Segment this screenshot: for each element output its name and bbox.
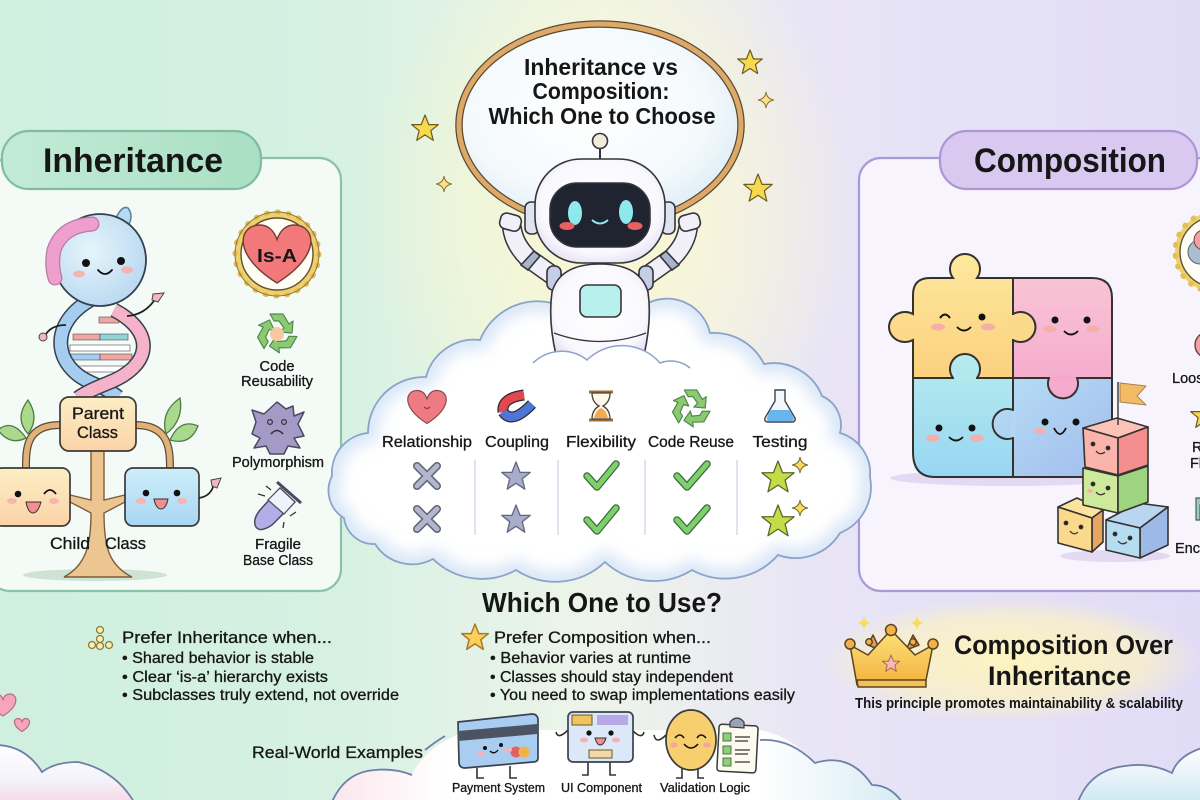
cloud front bumps xyxy=(490,346,715,420)
icon: fragile base class xyxy=(243,482,313,569)
label: child class xyxy=(50,535,146,553)
heading: composition: Composition xyxy=(974,142,1166,180)
column: coupling: Coupling xyxy=(485,434,549,451)
column: testing xyxy=(752,390,808,536)
puzzle: yellow piece xyxy=(889,254,1013,378)
badge: is-a xyxy=(235,212,319,296)
text block: prefer inheritance: Prefer Inheritance when... xyxy=(122,628,332,647)
example: payment system xyxy=(452,714,545,795)
robot head xyxy=(525,134,675,263)
robot xyxy=(498,134,702,366)
box: child left xyxy=(0,468,70,526)
box: parent class xyxy=(60,397,136,451)
label: real-world examples: Real-World Examples xyxy=(252,743,423,762)
text block: prefer composition: Prefer Composition when... xyxy=(494,628,711,647)
block: yellow xyxy=(1058,498,1103,552)
panel: composition xyxy=(859,131,1200,591)
example: ui component: UI Component xyxy=(561,781,643,795)
column: code reuse xyxy=(648,390,734,531)
icon: stars around the title xyxy=(412,50,774,201)
callout: composition over inheritance: Composition Over xyxy=(954,630,1173,660)
flag xyxy=(1118,382,1146,425)
icon: code reusability: Reusability xyxy=(241,374,314,390)
column: relationship: Relationship xyxy=(382,434,472,451)
icon: gold star xyxy=(462,624,488,649)
callout: composition over inheritance xyxy=(822,598,1200,722)
heading: which one to use: Which One to Use? xyxy=(482,587,722,618)
title text: Which One to Choose xyxy=(488,103,716,129)
label: child class: Child xyxy=(50,535,90,553)
text block: prefer inheritance: • Subclasses truly extend, not override xyxy=(122,687,399,704)
feature: runtime flexibility (clipped) xyxy=(1190,402,1200,472)
column: coupling xyxy=(485,395,549,532)
icon: polymorphism: Polymorphism xyxy=(232,455,324,471)
text block: prefer inheritance xyxy=(88,626,399,704)
icon: fragile base class: Base Class xyxy=(243,553,313,569)
example: payment system: Payment System xyxy=(452,781,545,795)
icon: fragile base class: Fragile xyxy=(255,537,301,553)
box: child right xyxy=(125,468,221,526)
icon: code reusability: Code xyxy=(260,359,294,375)
icon: crown xyxy=(845,616,938,687)
column: flexibility xyxy=(566,392,636,531)
title oval xyxy=(459,24,741,226)
bottom clouds xyxy=(0,730,1200,800)
title text: Composition: xyxy=(532,78,670,104)
example: validation logic: Validation Logic xyxy=(660,781,750,795)
panel: inheritance xyxy=(0,131,341,591)
column: flexibility: Flexibility xyxy=(566,434,636,451)
box: parent class: Class xyxy=(77,424,118,442)
puzzle: blue-right piece xyxy=(993,378,1112,477)
heading: inheritance: Inheritance xyxy=(43,142,223,180)
callout: composition over inheritance: Inheritance xyxy=(988,661,1131,691)
comparison table xyxy=(382,390,808,536)
illustration: class tree xyxy=(0,397,221,581)
robot body xyxy=(551,264,649,366)
illustration: puzzle pieces xyxy=(889,254,1130,486)
text block: prefer inheritance: • Shared behavior is stable xyxy=(122,650,314,667)
title text xyxy=(488,54,716,129)
column: code reuse: Code Reuse xyxy=(648,434,734,451)
robot arms xyxy=(498,212,702,290)
box: parent class: Parent xyxy=(72,405,124,423)
puzzle: pink piece xyxy=(1010,278,1112,398)
block: blue xyxy=(1106,503,1168,558)
title text: Inheritance vs xyxy=(524,54,678,80)
text block: prefer composition: • Classes should stay independent xyxy=(490,669,734,686)
puzzle: blue-left piece xyxy=(913,354,1013,477)
icon: polymorphism xyxy=(232,402,324,471)
heading: inheritance xyxy=(2,131,261,189)
badge: composition relation (clipped) xyxy=(1175,212,1200,292)
text block: prefer composition: • Behavior varies at runtime xyxy=(490,650,691,667)
badge: is-a: Is-A xyxy=(257,246,297,266)
text block: prefer composition xyxy=(462,624,795,704)
illustration: stacked blocks xyxy=(1058,382,1170,562)
text block: prefer inheritance: • Clear ‘is-a’ hierarchy exists xyxy=(122,669,328,686)
block: red xyxy=(1083,418,1148,475)
icon: code reusability xyxy=(241,314,314,390)
illustration: DNA character xyxy=(39,207,164,398)
label: child class: Class xyxy=(105,535,146,553)
heading: composition xyxy=(940,131,1197,189)
icon: small hierarchy xyxy=(88,626,112,650)
feature: loose coupling (clipped) xyxy=(1172,332,1200,387)
block: green xyxy=(1083,466,1148,513)
example: ui component xyxy=(556,712,644,795)
example: validation logic xyxy=(654,710,758,795)
column: relationship xyxy=(382,390,472,529)
comparison cloud back xyxy=(328,299,871,582)
text block: prefer composition: • You need to swap implementations easily xyxy=(490,687,795,704)
decorative hearts xyxy=(0,694,30,732)
feature: encapsulation (clipped) xyxy=(1175,498,1200,557)
column: testing: Testing xyxy=(752,434,808,451)
